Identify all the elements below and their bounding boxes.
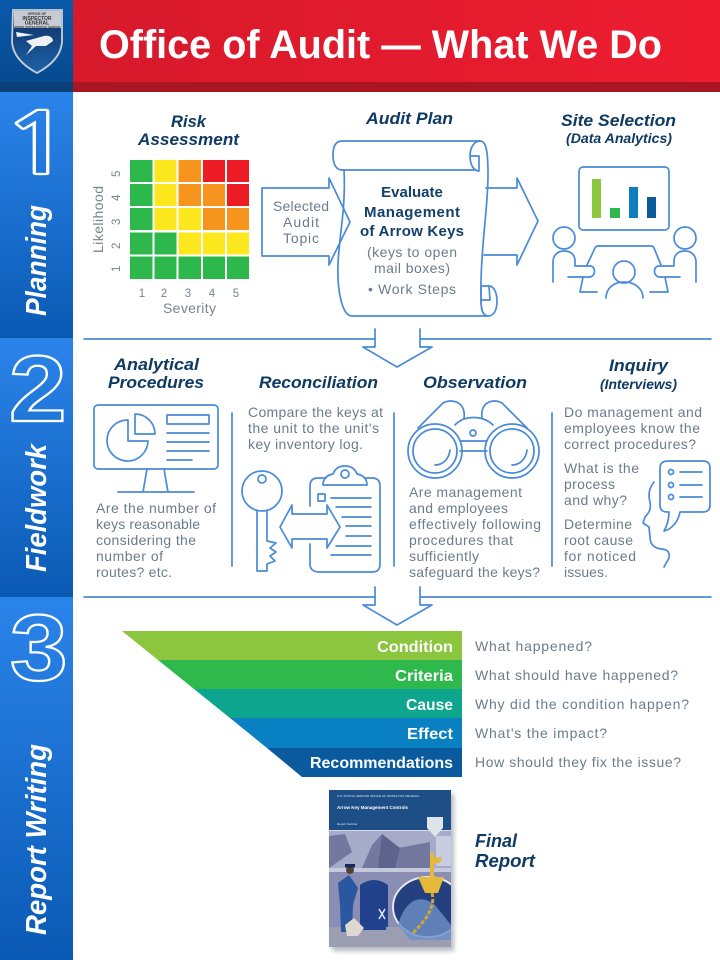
axis: likelihood: Likelihood (90, 186, 106, 253)
row: effect (230, 718, 607, 748)
arrow: selected audit topic: Audit (283, 214, 319, 230)
row: recommendations: How should they fix the issue? (475, 754, 681, 770)
row: condition: What happened? (475, 638, 592, 654)
divider (232, 413, 552, 566)
text: inquiry: and why? (564, 492, 627, 508)
panel: step 3 report writing sidebar (0, 595, 73, 960)
text: observation: sufficiently (409, 548, 479, 564)
text: inquiry: for noticed (564, 548, 636, 564)
axis: likelihood: 4 (111, 194, 123, 201)
row: recommendations (267, 748, 681, 777)
text: analytical procedures: routes? etc. (96, 564, 172, 580)
row: cause (194, 689, 689, 718)
text: analytical procedures: Are the number of (96, 500, 216, 516)
number 1: 1 (0, 103, 76, 187)
text: inquiry: root cause (564, 532, 633, 548)
heading: analytical procedures: Analytical (113, 355, 200, 374)
heading: final report: Report (475, 851, 536, 871)
text: analytical procedures (96, 500, 216, 580)
row: recommendations: Recommendations (310, 755, 453, 772)
axis: severity: Severity (163, 300, 216, 316)
heading: inquiry: (Interviews) (600, 377, 678, 392)
plan text: Management (364, 204, 460, 221)
heading: risk assessment: Assessment (137, 130, 240, 149)
final report cover image: Report Number (337, 822, 358, 826)
text: reconciliation (248, 404, 383, 452)
plan text: • Work Steps (368, 281, 456, 297)
text: inquiry: What is the (564, 460, 639, 476)
divider arrow: planning to fieldwork (84, 329, 711, 367)
plan text: (keys to open (367, 244, 457, 260)
chart: findings funnel (122, 631, 689, 777)
axis: likelihood: 5 (111, 171, 123, 177)
divider arrow: fieldwork to report writing (84, 587, 711, 625)
icon: inspector general shield: OFFICE OF (28, 12, 47, 16)
text: observation: safeguard the keys? (409, 564, 540, 580)
text: observation (409, 484, 541, 580)
heading: risk assessment (137, 112, 240, 149)
axis: severity: 5 (233, 288, 239, 300)
heading: risk assessment: Risk (171, 112, 207, 131)
axis: likelihood: 2 (111, 243, 123, 249)
text: observation: effectively following (409, 516, 541, 532)
mail carrier (338, 875, 358, 932)
row: cause: Cause (406, 697, 453, 714)
text: analytical procedures: keys reasonable (96, 516, 200, 532)
heading: analytical procedures (108, 355, 204, 392)
panel: step 2 fieldwork sidebar (0, 336, 73, 597)
row: condition (122, 631, 592, 660)
row: effect: Effect (407, 726, 454, 743)
icon: inspector general shield: UNITED STATES POSTAL SERVICE (14, 25, 60, 29)
heading: inquiry (600, 356, 678, 392)
heading: site selection: Site Selection (561, 111, 676, 130)
icon: key and clipboard comparison (242, 466, 380, 572)
header banner (0, 0, 720, 92)
axis: severity: 2 (161, 288, 167, 300)
text: reconciliation: Compare the keys at (248, 404, 383, 420)
text: inquiry (564, 404, 702, 580)
heading: site selection (561, 111, 676, 146)
plan text: mail boxes) (374, 260, 450, 276)
axis: likelihood: 3 (111, 219, 123, 225)
heading: site selection: (Data Analytics) (566, 131, 673, 146)
row: criteria: What should have happened? (475, 667, 678, 683)
text: analytical procedures: considering the (96, 532, 196, 548)
text: analytical procedures: number of (96, 548, 163, 564)
icon: inspector general shield: GENERAL (25, 20, 49, 26)
cover band text: U.S. POSTAL SERVICE OFFICE OF INSPECTOR GENERAL (337, 794, 420, 798)
arrow: selected audit topic: Selected (273, 198, 329, 214)
heading: observation: Observation (423, 373, 527, 392)
heading: final report: Final (475, 831, 518, 851)
label: planning: Planning (21, 205, 53, 316)
plan text: Evaluate (381, 184, 443, 201)
final report cover image (329, 790, 463, 951)
icon: binoculars (408, 401, 539, 478)
axis: severity: 3 (185, 288, 191, 300)
icon: person speaking with list bubble (643, 461, 710, 567)
axis: severity: 1 (139, 288, 145, 300)
number 3: 3 (10, 595, 68, 700)
text: observation: Are management (409, 484, 522, 500)
axis: likelihood: 1 (111, 266, 123, 272)
arrow: selected audit topic (262, 178, 350, 265)
label: fieldwork: Fieldwork (21, 442, 53, 572)
icon: inspector general shield (12, 10, 62, 73)
row: effect: What's the impact? (475, 725, 607, 741)
heading: final report (475, 831, 536, 871)
magnified key and chain (392, 876, 451, 938)
heading: reconciliation: Reconciliation (259, 373, 378, 392)
icon: inspector general shield: INSPECTOR (22, 16, 52, 22)
row: condition: Condition (377, 639, 453, 656)
icon: monitor with charts (94, 405, 218, 492)
number 2: 2 (9, 336, 67, 441)
heading: inquiry: Inquiry (609, 356, 670, 375)
axis: likelihood (90, 171, 123, 272)
plan text (360, 184, 464, 297)
axis: severity: 4 (209, 288, 216, 300)
mailbox (360, 880, 388, 930)
text: inquiry: employees know the (564, 420, 700, 436)
label: report writing: Report Writing (21, 744, 53, 935)
text: inquiry: Do management and (564, 404, 702, 420)
row: cause: Why did the condition happen? (475, 696, 689, 712)
row: criteria: Criteria (395, 668, 453, 685)
text: observation: and employees (409, 500, 508, 516)
plan text: of Arrow Keys (360, 223, 464, 240)
text: inquiry: process (564, 476, 615, 492)
icon: data analytics meeting (553, 167, 696, 298)
text: inquiry: correct procedures? (564, 436, 696, 452)
arrow: selected audit topic: Topic (283, 230, 319, 246)
text: reconciliation: key inventory log. (248, 436, 363, 452)
final report cover image: Arrow Key Management Controls (337, 805, 409, 810)
text: inquiry: issues. (564, 564, 608, 580)
text: inquiry: Determine (564, 516, 632, 532)
title: Office of Audit — What We Do (99, 23, 662, 67)
heading: audit plan: Audit Plan (365, 109, 453, 128)
arrow: plan to site selection (484, 178, 538, 265)
row: criteria (158, 660, 678, 689)
panel: step 1 planning sidebar (0, 92, 76, 338)
chart: risk matrix (90, 160, 249, 316)
panel: audit plan scroll (333, 141, 497, 316)
axis: severity (139, 288, 239, 316)
text: reconciliation: the unit to the unit's (248, 420, 379, 436)
text: observation: procedures that (409, 532, 513, 548)
heading: analytical procedures: Procedures (108, 373, 204, 392)
